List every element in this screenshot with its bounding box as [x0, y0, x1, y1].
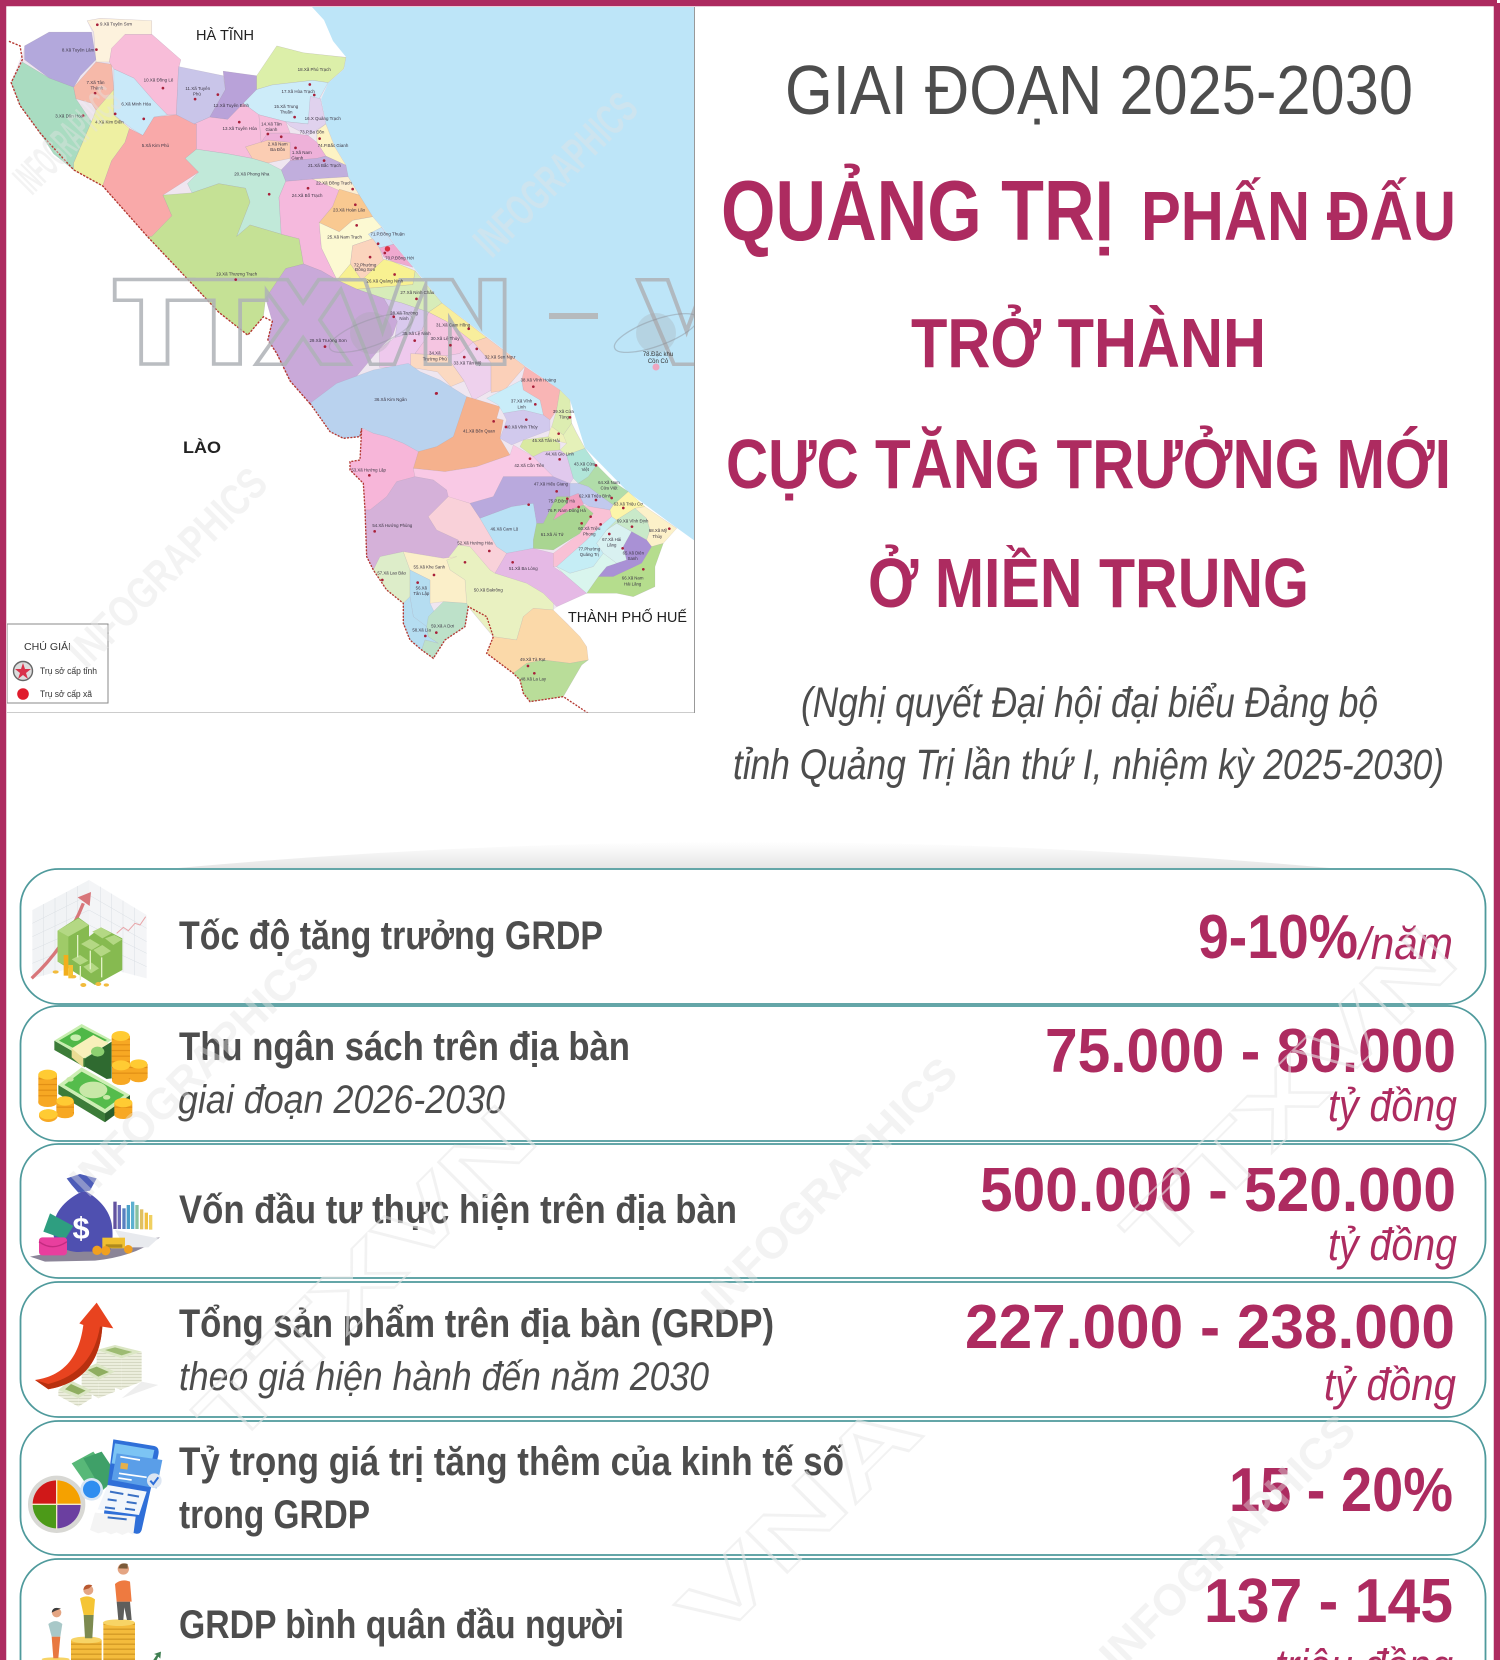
map labels north: Ninh [399, 316, 409, 321]
map labels south: 62.Xã Triệu Bình [579, 493, 612, 498]
watermark: faint agency marks: TTXVN [177, 1087, 554, 1464]
map labels north: 27.Xã Ninh Châu [400, 290, 435, 295]
map labels south: 64.Xã Nam [598, 480, 620, 485]
map labels north: 8.Xã Tuyên Lâm [62, 47, 95, 52]
map south commune dots [368, 385, 671, 675]
island label Con Co [643, 352, 673, 370]
map labels south: 48.Xã La Lay [521, 676, 547, 681]
value: 137 - 145 [1204, 1567, 1453, 1636]
map labels south: 68.Xã Mỹ [649, 528, 668, 533]
map place name: Laos: LÀO [183, 438, 221, 457]
map labels south: 63.Xã Triệu Cơ [614, 501, 643, 506]
map labels north: 34.Xã [429, 350, 441, 355]
map labels north: 74.P.Bắc Gianh [318, 142, 349, 148]
map labels north: Thành [91, 85, 104, 91]
map labels south: 58.Xã Lìa [412, 627, 432, 632]
heading: main title: TRỞ THÀNH [911, 303, 1266, 382]
map labels south: 77.Phường [578, 547, 601, 552]
map labels north: 18.Xã Phú Trạch [298, 67, 331, 72]
map legend: Trụ sở cấp tỉnh [40, 666, 97, 676]
icon: cash and coins [38, 1024, 148, 1122]
map labels south: Linh [518, 404, 526, 409]
map labels south: Việt [582, 467, 590, 472]
icon: money bag [30, 1174, 160, 1262]
label [179, 1440, 844, 1537]
map labels north: 24.Xã Bố Trạch [292, 193, 323, 198]
map labels south: 65.Xã Diên [623, 551, 645, 556]
panel: investment capital [20, 1144, 1486, 1278]
panel: map of Quang Tri province [0, 7, 720, 713]
value [965, 1293, 1456, 1410]
map watermark TTXVN [112, 278, 694, 366]
map labels south: 37.Xã Vĩnh [511, 399, 533, 404]
map labels south: Tùng [559, 414, 569, 419]
label [179, 1302, 774, 1399]
map labels north: Gianh [291, 155, 304, 160]
heading: main title: PHẤN ĐẤU [1141, 177, 1456, 255]
map labels north: 9.Xã Tuyên Sơn [100, 22, 133, 27]
heading: period: GIAI ĐOẠN 2025-2030 [785, 51, 1413, 129]
label: Tốc độ tăng trưởng GRDP [179, 914, 603, 958]
icon: money chart growth [32, 880, 147, 987]
map labels north: 16.X Quảng Trạch [305, 116, 341, 121]
map labels south: 59.Xã A Dơi [431, 623, 454, 628]
map labels south: 51.Xã Ba Lòng [509, 566, 538, 571]
icon: money bag: $ [72, 1211, 90, 1245]
value: 75.000 - 80.000 [1045, 1017, 1456, 1086]
label: theo giá hiện hành đến năm 2030 [179, 1355, 709, 1399]
watermark: faint agency marks: INFOGRAPHICS [58, 458, 277, 677]
value [1045, 1017, 1457, 1131]
map labels north [55, 22, 515, 402]
map labels north: 35.Xã Lệ Ninh [402, 331, 431, 336]
map labels south: Cửa Việt [600, 485, 618, 490]
map labels north: 3.Xã Dân Hóa [55, 113, 84, 119]
map labels south: 76.P. Nam Đông Hà [548, 508, 586, 513]
map labels north: 14.Xã Tân [261, 121, 282, 126]
map labels north: Ba Đồn [270, 147, 286, 152]
map labels south: 53.Xã Hướng Lập [351, 467, 387, 472]
map labels north: 33.Xã Tân Mỹ [454, 360, 482, 366]
map labels north: 6.Xã Minh Hóa [121, 102, 151, 107]
map labels south: 75.P.Đông Hà [548, 499, 576, 504]
map legend: Trụ sở cấp xã [40, 689, 92, 699]
map labels south: 40.Xã Vĩnh Thủy [506, 425, 539, 430]
map labels north: 5.Xã Kim Phú [142, 143, 169, 148]
map labels south: 41.Xã Bến Quan [463, 428, 496, 433]
map labels south: 55.Xã Khe Sanh [414, 564, 446, 569]
value: tỷ đồng [1324, 1359, 1456, 1410]
map northern communes [11, 18, 525, 406]
panel: GRDP growth rate [20, 869, 1486, 1004]
map frame lines [7, 7, 694, 713]
label [178, 1025, 630, 1122]
map labels south: Thủy [652, 534, 663, 539]
panel: GRDP per capita [20, 1559, 1486, 1660]
map labels south: 54.Xã Hướng Phùng [372, 523, 413, 528]
map labels north: Phú [193, 91, 201, 97]
map labels north: 70.P.Đồng Hới [385, 255, 414, 260]
text block: resolution source [733, 679, 1444, 789]
map labels north: 15.Xã Trung [274, 104, 299, 109]
shadow arc above cards [178, 842, 1330, 868]
map labels south: Phong [583, 531, 596, 536]
map labels south: 46.Xã Cam Lộ [490, 527, 519, 532]
value: /năm [1356, 918, 1453, 969]
label: trong GRDP [179, 1493, 370, 1537]
map labels south: 61.Xã Ái Tử [541, 532, 564, 537]
label: Thu ngân sách trên địa bàn [179, 1025, 630, 1069]
map labels north: 11.Xã Tuyên [185, 86, 211, 91]
value: 227.000 - 238.000 [965, 1293, 1455, 1362]
map labels north: 29.Xã Trường Sơn [309, 338, 347, 343]
map labels north: 25.Xã Nam Trạch [327, 235, 362, 240]
watermark: faint agency marks: VNA [660, 1380, 939, 1659]
map labels south: Tân Lập [413, 591, 430, 596]
icon: pie chart and phone [28, 1439, 162, 1535]
island label Con Co: 78.Đặc khu [643, 352, 673, 358]
map labels south: 69.Xã Vĩnh Định [617, 518, 649, 523]
map labels north: 13.Xã Tuyên Hóa [223, 126, 257, 131]
heading: main title: Ở MIỀN TRUNG [868, 543, 1309, 622]
map labels north: Gianh [265, 127, 278, 132]
map labels north: 32.Xã Sen Ngư [485, 355, 515, 360]
watermark: faint agency marks: INFOGRAPHICS [692, 1048, 967, 1323]
map labels south: 43.Xã Cửa [574, 462, 595, 467]
map place name: Ha Tinh: HÀ TĨNH [196, 27, 254, 44]
value: tỷ đồng [1328, 1219, 1457, 1270]
map labels north: 36.Xã Kim Ngân [374, 397, 407, 402]
map legend: CHÚ GIẢI [24, 640, 71, 653]
map labels north: 10.Xã Đồng Lê [144, 78, 174, 83]
map labels north: 7.Xã Tân [87, 80, 105, 85]
heading: main title [721, 163, 1456, 622]
map labels north: 28.Xã Trường [390, 310, 418, 315]
map labels north: 31.Xã Cam Hồng [436, 322, 471, 327]
map labels north: 26.Xã Quảng Ninh [366, 278, 404, 283]
map labels north: 72.Phường [354, 262, 377, 267]
map labels south: 42.Xã Cồn Tiên [514, 463, 545, 468]
island label Con Co: Cồn Cỏ [648, 358, 669, 365]
map labels north: Trường Phú [423, 356, 447, 361]
map sea [312, 7, 695, 541]
watermark: faint agency marks: INFOGRAPHICS [61, 938, 329, 1206]
panel: budget revenue [20, 1006, 1486, 1141]
map labels south: 45.Xã Tân Hải [532, 438, 560, 443]
map labels south [351, 378, 668, 681]
map labels south: 66.Xã Nam [622, 575, 644, 580]
map labels south: 57.Xã Lao Bảo [377, 570, 407, 575]
map labels south: 50.Xã Đakrông [474, 588, 503, 593]
map place name: Hue: THÀNH PHỐ HUẾ [568, 608, 687, 626]
map labels north: 20.Xã Phong Nha [234, 171, 270, 176]
label: Vốn đầu tư thực hiện trên địa bàn [179, 1188, 737, 1232]
map labels north: 17.Xã Hòa Trạch [281, 89, 315, 94]
map labels north: 30.Xã Lệ Thủy [431, 335, 460, 341]
map labels south: 44.Xã Gio Linh [545, 451, 575, 456]
map labels south: 60.Xã Triệu [578, 526, 601, 531]
map southern communes [310, 363, 677, 702]
map labels south: 52.Xã Hướng Hóa [457, 540, 493, 545]
map labels north: 71.P.Đồng Thuận [370, 231, 405, 237]
map labels north: 4.Xã Kim Điền [95, 119, 124, 125]
map labels north: 19.Xã Thượng Trạch [216, 271, 258, 276]
map labels north: Thuần [280, 109, 293, 114]
map labels south: 67.Xã Hải [602, 537, 621, 542]
map land silhouette [11, 18, 677, 702]
heading: main title: QUẢNG TRỊ [721, 163, 1114, 259]
map labels south: 56.Xã [416, 586, 428, 591]
map labels south: Sanh [628, 556, 638, 561]
map labels south: 49.Xã Tà Rụt [520, 657, 546, 662]
label: GRDP bình quân đầu người [179, 1603, 624, 1647]
map labels south: Lăng [607, 543, 617, 548]
map legend [7, 624, 108, 703]
watermark: faint agency marks: INFOGRAPHICS [464, 83, 647, 266]
map labels north: 22.Xã Đồng Trạch [316, 181, 352, 186]
map labels south: 38.Xã Vĩnh Hoàng [521, 378, 557, 383]
label: Tổng sản phẩm trên địa bàn (GRDP) [179, 1302, 774, 1346]
value: 9-10% [1198, 903, 1358, 972]
map labels north: 21.Xã Bắc Trạch [308, 162, 341, 168]
icon: rising arrow over money [35, 1303, 158, 1407]
text block: resolution source: (Nghị quyết Đại hội đại biểu Đảng bộ [801, 679, 1378, 727]
map labels north: 12.Xã Tuyên Bình [214, 103, 249, 108]
map labels north: 2.Xã Nam [268, 141, 288, 147]
watermark: faint agency marks: TTXVN [1104, 909, 1475, 1280]
icon: people on coin stacks [42, 1563, 161, 1660]
value: tỷ đồng [1328, 1080, 1457, 1131]
map commune dots [82, 23, 478, 395]
label: Tỷ trọng giá trị tăng thêm của kinh tế số [179, 1440, 844, 1484]
map Laos border [9, 41, 588, 713]
label: giai đoạn 2026-2030 [178, 1078, 505, 1122]
panel: digital economy share [20, 1421, 1486, 1555]
value [980, 1156, 1457, 1270]
map labels north: 73.P.Ba Đồn [300, 130, 325, 135]
value: 500.000 - 520.000 [980, 1156, 1456, 1225]
map labels south: Hải Lăng [624, 581, 642, 586]
map labels south: Quảng Trị [580, 552, 599, 557]
value: 15 - 20% [1229, 1456, 1453, 1525]
map labels north: 23.Xã Hoàn Lão [333, 208, 366, 213]
map labels north: Đồng Sơn [355, 267, 376, 272]
map labels north: 1.Xã Nam [292, 150, 312, 155]
map labels south: 39.Xã Cửa [553, 409, 574, 414]
panel: GRDP total [20, 1282, 1486, 1417]
map labels south: 47.Xã Hiếu Giang [534, 482, 569, 487]
